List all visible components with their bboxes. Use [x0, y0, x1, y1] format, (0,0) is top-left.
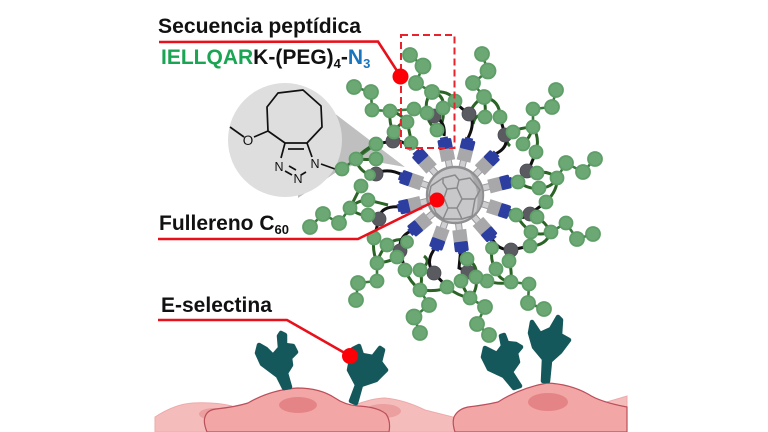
dark spacer beads: [369, 107, 537, 280]
PEG spokes and azide linkers: [396, 136, 514, 254]
label: e-selectina: E-selectina: [161, 294, 272, 317]
label: peptide sequence formula: 3: [363, 56, 370, 71]
endothelial cells: [155, 383, 627, 432]
label: secuencia peptídica: Secuencia peptídica: [158, 15, 361, 38]
molecule: cyclooctane-triazole: [230, 90, 335, 186]
molecule: cyclooctane-triazole: O: [243, 133, 253, 148]
label: peptide sequence formula: IELLQARK-(PEG): [161, 46, 334, 69]
magnifier callout with triazole molecule: [228, 83, 405, 198]
leader: fullereno: [158, 192, 444, 239]
outer chain bonds: [310, 54, 595, 335]
label: peptide sequence formula: N: [348, 46, 363, 69]
leader: e-selectina: [158, 320, 358, 364]
dark green branches: [350, 92, 557, 298]
dashed selection box: [401, 35, 454, 148]
label: peptide sequence formula: 4: [334, 56, 342, 71]
label: peptide sequence formula: -: [341, 46, 348, 69]
label: fullereno C60: Fullereno C: [159, 212, 275, 235]
leader: secuencia peptídica: [159, 42, 408, 84]
molecule: cyclooctane-triazole: N: [274, 160, 284, 174]
molecule: cyclooctane-triazole: N: [293, 172, 303, 186]
label: fullereno C60: 60: [275, 222, 289, 237]
molecule: cyclooctane-triazole: N: [310, 157, 320, 171]
peptide beads: [303, 47, 602, 342]
black linkers: [370, 101, 546, 287]
E-selectin receptors: [257, 317, 569, 403]
fullerene C60: [427, 167, 483, 223]
